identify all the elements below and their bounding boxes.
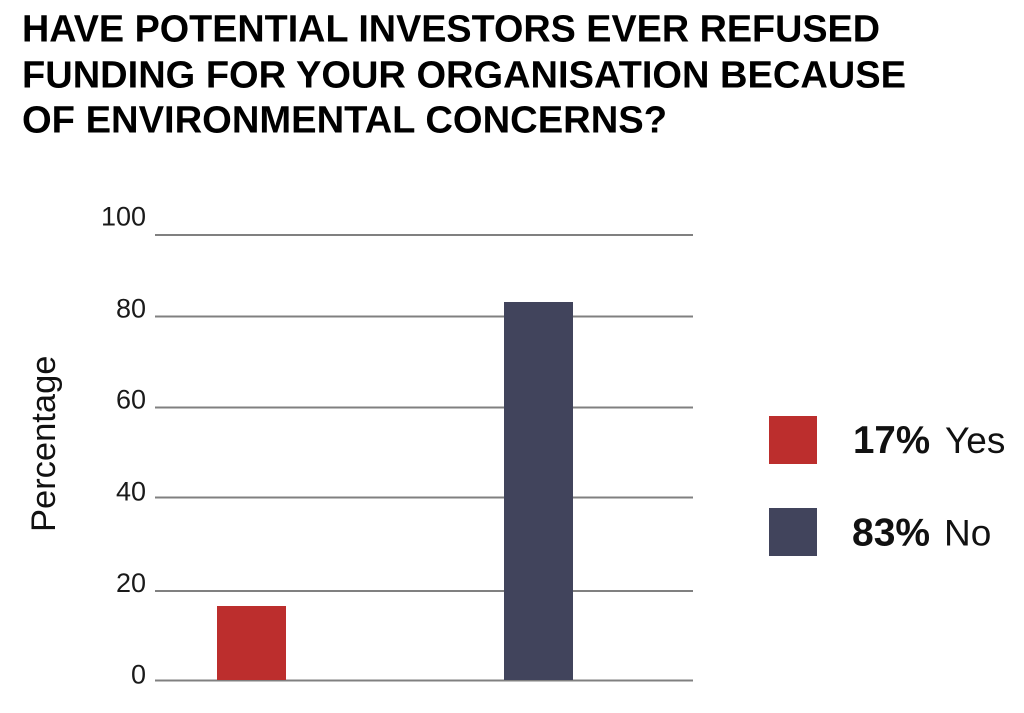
- title: FUNDING FOR YOUR ORGANISATION BECAUSE: [22, 54, 906, 96]
- bar: no: [504, 302, 573, 680]
- legend item: no: No: [944, 512, 991, 554]
- bar: yes: [217, 606, 286, 680]
- y-axis tick labels: 0: [131, 660, 146, 690]
- title: OF ENVIRONMENTAL CONCERNS?: [22, 100, 667, 142]
- legend: [769, 416, 1005, 556]
- legend item: yes: Yes: [945, 420, 1005, 461]
- legend item: no: [769, 508, 991, 556]
- bar chart: [25, 202, 693, 690]
- y-axis tick labels: 80: [116, 294, 146, 324]
- y-axis tick labels: [101, 202, 146, 690]
- title: HAVE POTENTIAL INVESTORS EVER REFUSED: [22, 8, 880, 50]
- legend item: yes: 17%: [853, 419, 930, 462]
- title: [22, 8, 906, 142]
- legend item: no: 83%: [852, 512, 930, 554]
- y-axis tick labels: 60: [116, 384, 146, 414]
- y-axis title: Percentage: [25, 356, 63, 532]
- y-axis tick labels: 40: [116, 476, 146, 506]
- y-axis tick labels: 100: [101, 202, 146, 232]
- y-axis tick labels: 20: [116, 568, 146, 598]
- legend item: yes: [769, 416, 1005, 464]
